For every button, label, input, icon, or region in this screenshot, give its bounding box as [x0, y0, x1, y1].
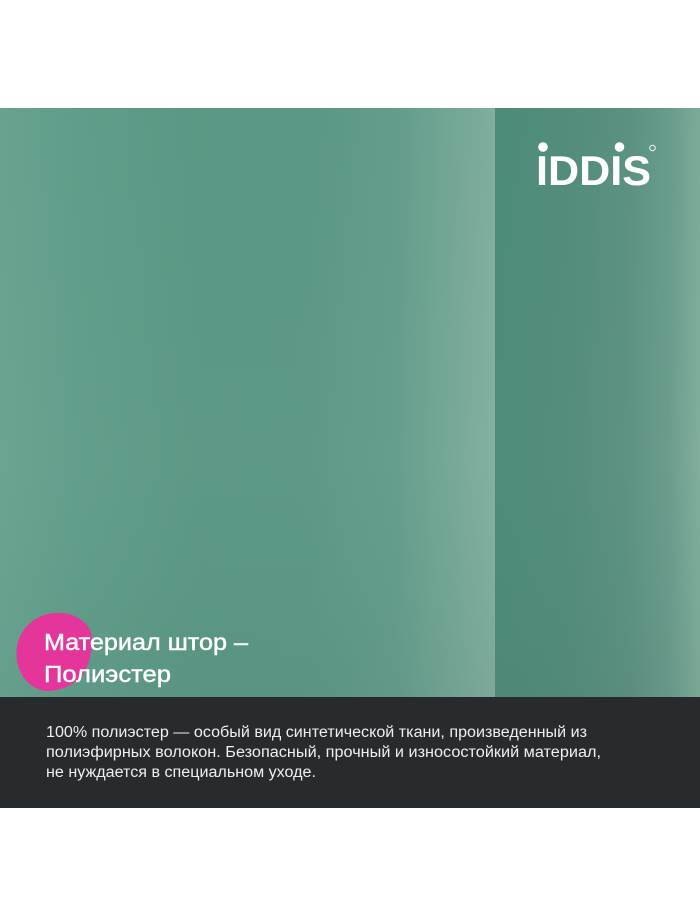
- dark text band: [0, 697, 700, 808]
- pink accent blob: [16, 613, 92, 691]
- heading: Материал штор –: [44, 629, 249, 655]
- description text: не нуждается в специальном уходе.: [46, 764, 316, 781]
- logo: IDDIS: IDDIS: [536, 147, 651, 194]
- fabric photo: polyester curtain: [0, 108, 700, 697]
- description text: полиэфирных волокон. Безопасный, прочный и износостойкий материал,: [46, 744, 601, 761]
- heading: Полиэстер: [44, 661, 171, 687]
- description text: [46, 724, 601, 781]
- description text: 100% полиэстер — особый вид синтетической ткани, произведенный из: [46, 724, 587, 741]
- heading: [44, 629, 249, 687]
